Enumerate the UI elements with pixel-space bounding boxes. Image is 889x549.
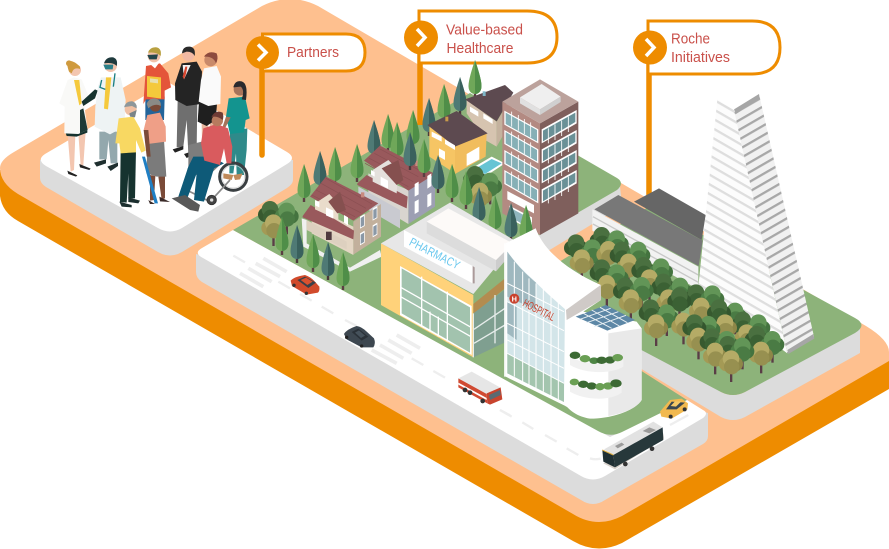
person: man in red sweater [143, 47, 171, 120]
hospital sign: HOSPITAL [521, 298, 557, 324]
orange base slab [0, 170, 889, 549]
Roche tower [698, 94, 814, 354]
person: older man in yellow [115, 101, 146, 207]
person: man in wheelchair [172, 112, 247, 212]
callout: Partners: Partners [287, 45, 339, 61]
trees around yellow house [463, 166, 502, 214]
hospital sign: H [512, 294, 517, 303]
pharmacy sign: PHARMACY [407, 235, 462, 272]
callout: Roche Initiatives: Roche [671, 32, 710, 48]
tower block [502, 79, 578, 235]
road markings [233, 256, 510, 415]
hospital sign [509, 294, 557, 324]
front conifers [276, 132, 532, 290]
panel: houses and tower block [258, 79, 578, 272]
callout: Value-based Healthcare: Healthcare [446, 41, 514, 57]
house: grey-blue house [357, 146, 435, 228]
panel: town green [233, 93, 687, 435]
panel: Roche platform [520, 206, 862, 420]
vehicle: red car [291, 275, 319, 295]
person: woman doctor [59, 60, 98, 177]
building: pharmacy [381, 203, 517, 357]
callout: Roche Initiatives [633, 21, 780, 196]
solar panels [576, 305, 635, 331]
person: older woman with cane [142, 98, 170, 204]
callout: Roche Initiatives: Initiatives [671, 50, 730, 66]
house: beige back house [465, 85, 513, 147]
panel: Roche buildings [564, 94, 814, 382]
panel: road platform [196, 230, 708, 504]
building: hospital [505, 228, 642, 419]
panel: partners platform [40, 82, 293, 256]
vehicle: bus [602, 422, 664, 469]
round trees, left group [258, 201, 299, 246]
callout: Partners [246, 34, 365, 155]
vehicle: black car [344, 326, 375, 348]
callout: Value-based Healthcare: Value-based [446, 22, 523, 38]
vehicle: taxi [660, 399, 688, 419]
back conifers [298, 60, 482, 202]
low building [592, 188, 706, 289]
vehicle: fire truck [458, 372, 502, 405]
person: suit man [173, 47, 202, 158]
house: beige front house [302, 177, 382, 272]
balconies [570, 352, 623, 399]
person: woman in white blouse [198, 52, 221, 142]
house: yellow house [427, 111, 505, 177]
person: male doctor [94, 57, 126, 171]
person: nurse [223, 81, 250, 180]
callout: Value-based Healthcare [404, 11, 557, 125]
people group: partners [59, 47, 250, 212]
tree grove [564, 227, 784, 382]
